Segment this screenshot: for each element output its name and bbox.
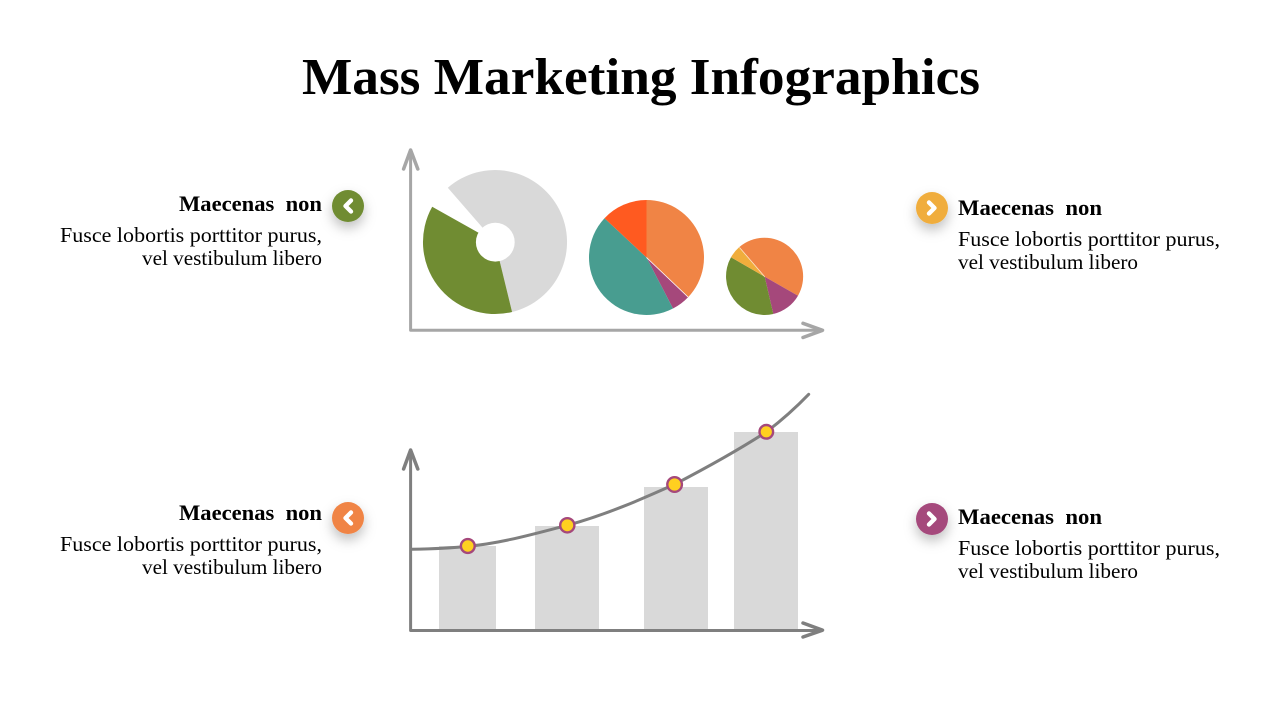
callout text: bottom left: Maecenas non (179, 500, 322, 525)
icon: coral left chevron (332, 502, 364, 534)
callout text: bottom right: Maecenas non (958, 504, 1102, 529)
callout text: bottom right: Fusce lobortis porttitor purus, (958, 536, 1220, 560)
chart axes: top (404, 150, 822, 338)
callout text: top left: Fusce lobortis porttitor purus, (60, 223, 322, 247)
icon: purple right chevron (916, 503, 948, 535)
pie 3 (726, 238, 803, 315)
callout text: top right (958, 195, 1220, 274)
icon: green left chevron (332, 190, 364, 222)
panel: pie charts (404, 150, 822, 338)
callout: top right (916, 192, 1220, 274)
callout text: top right: Maecenas non (958, 195, 1102, 220)
callout text: bottom right (958, 504, 1220, 583)
callout text: bottom left (60, 500, 322, 579)
panel: bar and line chart (404, 394, 822, 637)
title: Mass Marketing Infographics (302, 49, 980, 106)
callout text: top right: vel vestibulum libero (958, 250, 1138, 274)
chart axes: bottom (404, 450, 822, 637)
trend curve (412, 394, 809, 549)
callout text: top right: Fusce lobortis porttitor purus, (958, 227, 1220, 251)
callout text: top left (60, 191, 322, 270)
callout: bottom left (60, 500, 364, 579)
bars (439, 432, 798, 630)
callout text: top left: vel vestibulum libero (142, 246, 322, 270)
data points (461, 425, 773, 553)
callout text: bottom left: vel vestibulum libero (142, 555, 322, 579)
icon: orange right chevron (916, 192, 948, 224)
callout: top left (60, 190, 364, 270)
callout text: bottom left: Fusce lobortis porttitor purus, (60, 532, 322, 556)
callout text: bottom right: vel vestibulum libero (958, 559, 1138, 583)
callout: bottom right (916, 503, 1220, 583)
pie 1 (423, 170, 567, 314)
callout text: top left: Maecenas non (179, 191, 322, 216)
pie 2 (589, 200, 704, 315)
